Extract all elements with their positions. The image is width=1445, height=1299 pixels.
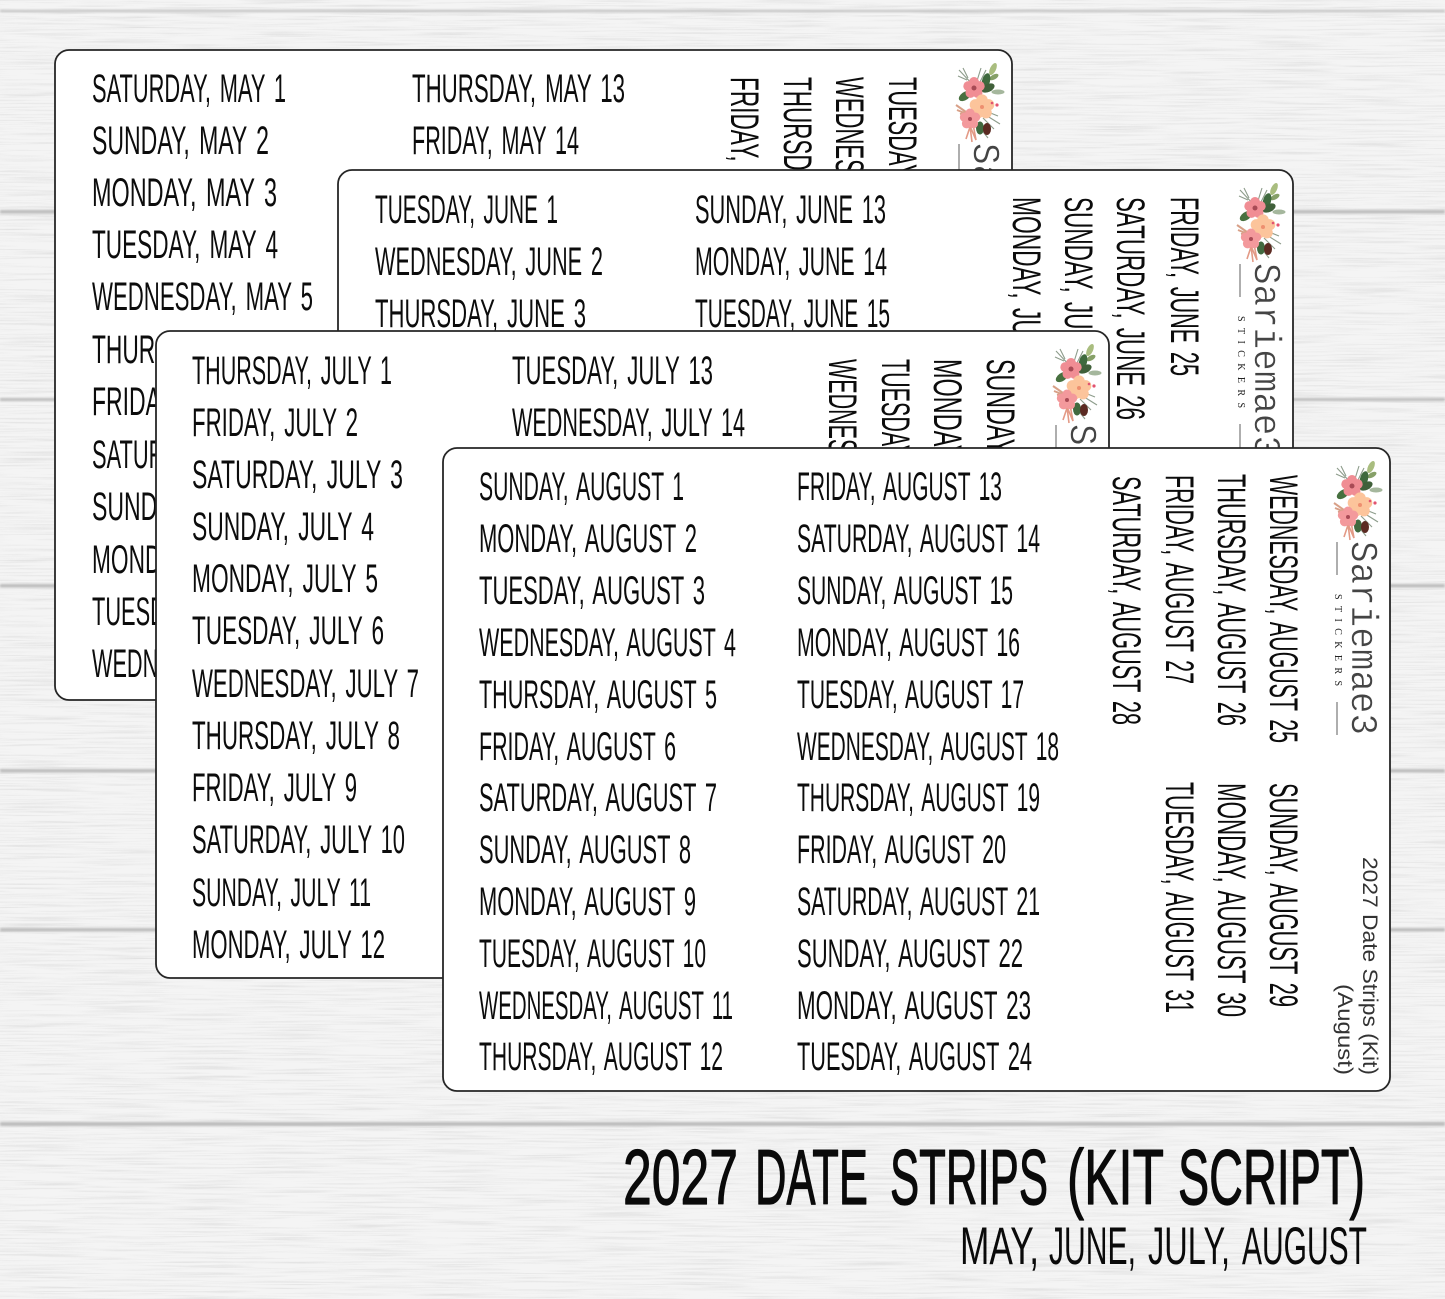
June date strips column one: THURSDAY, JUNE 3 (375, 292, 586, 336)
August date strips column one: THURSDAY, AUGUST 12 (479, 1035, 723, 1079)
June date strips column two (695, 188, 890, 336)
August date strips column two: WEDNESDAY, AUGUST 18 (797, 725, 1059, 769)
July brand name: Sariemae3 (1059, 424, 1102, 618)
icon: June floral logo (1237, 182, 1286, 262)
June date strips column two: MONDAY, JUNE 14 (695, 240, 887, 284)
May date strips column one: MONDAY, MAY 10 (92, 538, 284, 582)
July date strips column one: MONDAY, JULY 5 (192, 557, 378, 601)
July date strips column one: FRIDAY, JULY 9 (192, 766, 357, 810)
July date strips column one: FRIDAY, JULY 2 (192, 401, 358, 445)
May vertical date strips: WEDNESDAY, MAY 26 (827, 77, 871, 309)
May date strips column two (412, 67, 625, 163)
July date strips column two: WEDNESDAY, JULY 14 (512, 401, 745, 445)
subtitle: JUNE, (1049, 1217, 1136, 1276)
May vertical date strips: FRIDAY, MAY 28 (722, 77, 766, 252)
July date strips column one (192, 349, 419, 967)
May date strips column one (92, 67, 320, 686)
May vertical date strips: TUESDAY, MAY 25 (880, 77, 924, 269)
May date strips column one: WEDNESDAY, MAY 5 (92, 275, 313, 319)
August date strips column one: MONDAY, AUGUST 9 (479, 880, 696, 924)
August vertical date strips upper group: FRIDAY, AUGUST 27 (1157, 475, 1201, 684)
title: 2027 (623, 1133, 738, 1221)
May vertical date strips: THURSDAY, MAY 27 (775, 77, 819, 292)
May date strips column one: SATURDAY, MAY 8 (92, 433, 286, 477)
July date strips column one: TUESDAY, JULY 6 (192, 609, 384, 653)
title (623, 1133, 1365, 1221)
July date strips column two (512, 349, 745, 445)
August date strips column two: SUNDAY, AUGUST 15 (797, 569, 1013, 613)
August date strips column one: SATURDAY, AUGUST 7 (479, 776, 717, 820)
August date strips column two: SATURDAY, AUGUST 21 (797, 880, 1040, 924)
title: STRIPS (890, 1133, 1048, 1221)
August vertical date strips upper group (1104, 474, 1305, 743)
August date strips column one: MONDAY, AUGUST 2 (479, 517, 697, 561)
June date strips column one (375, 188, 603, 336)
June date strips column one: TUESDAY, JUNE 1 (375, 188, 558, 232)
July date strips column one: THURSDAY, JULY 8 (192, 714, 400, 758)
August date strips column two: THURSDAY, AUGUST 19 (797, 776, 1040, 820)
May date strips column one: FRIDAY, MAY 7 (92, 380, 257, 424)
sheet caption (1333, 857, 1381, 1075)
August date strips column two: FRIDAY, AUGUST 20 (797, 828, 1006, 872)
August vertical date strips lower group: SUNDAY, AUGUST 29 (1261, 783, 1305, 1007)
June date strips column two: SUNDAY, JUNE 13 (695, 188, 886, 232)
panel: July sticker sheet (156, 331, 1109, 978)
May brand name: Sariemae3 (962, 143, 1005, 337)
June date strips column two: TUESDAY, JUNE 15 (695, 292, 890, 336)
sheet caption: (August) (1333, 984, 1356, 1075)
August brand logo text: Sariemae3 (1340, 541, 1383, 735)
August date strips column two: FRIDAY, AUGUST 13 (797, 465, 1002, 509)
July vertical date strips: SUNDAY, JULY 25 (978, 359, 1022, 557)
August date strips column one: WEDNESDAY, AUGUST 11 (479, 984, 733, 1028)
August date strips column two: MONDAY, AUGUST 23 (797, 984, 1031, 1028)
subtitle: MAY, (960, 1217, 1039, 1276)
August date strips column two: SATURDAY, AUGUST 14 (797, 517, 1040, 561)
August date strips column two: TUESDAY, AUGUST 24 (797, 1035, 1032, 1079)
May date strips column one: SUNDAY, MAY 9 (92, 485, 269, 529)
July date strips column one: WEDNESDAY, JULY 7 (192, 662, 419, 706)
August vertical date strips upper group: THURSDAY, AUGUST 26 (1209, 474, 1253, 726)
June brand name: Sariemae3 (1243, 263, 1286, 457)
subtitle: JULY, (1148, 1217, 1230, 1276)
July vertical date strips: WEDNESDAY, JULY 28 (820, 359, 864, 591)
August date strips column two (797, 465, 1059, 1079)
June vertical date strips: SATURDAY, JUNE 26 (1108, 197, 1152, 420)
August date strips column one (479, 465, 736, 1079)
July date strips column two: TUESDAY, JULY 13 (512, 349, 713, 393)
July vertical date strips (820, 359, 1022, 591)
August vertical date strips lower group: MONDAY, AUGUST 30 (1209, 783, 1253, 1017)
August vertical date strips upper group: WEDNESDAY, AUGUST 25 (1261, 475, 1305, 743)
subtitle (960, 1217, 1367, 1276)
panel: May sticker sheet (55, 50, 1012, 700)
May date strips column two: THURSDAY, MAY 13 (412, 67, 625, 111)
July date strips column one: SATURDAY, JULY 10 (192, 818, 405, 862)
May date strips column one: WEDNESDAY, MAY 12 (92, 642, 320, 686)
August date strips column one: WEDNESDAY, AUGUST 4 (479, 621, 736, 665)
June vertical date strips: FRIDAY, JUNE 25 (1162, 197, 1206, 376)
May date strips column one: THURSDAY, MAY 6 (92, 328, 297, 372)
May date strips column one: MONDAY, MAY 3 (92, 171, 277, 215)
July date strips column one: THURSDAY, JULY 1 (192, 349, 392, 393)
July date strips column one: SUNDAY, JULY 11 (192, 871, 371, 915)
August date strips column one: SUNDAY, AUGUST 8 (479, 828, 691, 872)
panel: August sticker sheet (443, 448, 1390, 1091)
August vertical date strips upper group: SATURDAY, AUGUST 28 (1104, 476, 1148, 725)
August date strips column two: MONDAY, AUGUST 16 (797, 621, 1020, 665)
August brand logo text: STICKERS (1332, 594, 1343, 686)
June date strips column one: WEDNESDAY, JUNE 2 (375, 240, 603, 284)
July vertical date strips: TUESDAY, JULY 27 (873, 359, 917, 554)
title: (KIT (1067, 1133, 1164, 1221)
July date strips column one: SUNDAY, JULY 4 (192, 505, 374, 549)
May date strips column one: TUESDAY, MAY 4 (92, 223, 278, 267)
icon: May floral logo (956, 62, 1004, 142)
July date strips column one: MONDAY, JULY 12 (192, 923, 385, 967)
June brand name: STICKERS (1235, 316, 1246, 408)
panel: June sticker sheet (338, 170, 1293, 815)
August date strips column one: SUNDAY, AUGUST 1 (479, 465, 684, 509)
June vertical date strips (1004, 197, 1206, 420)
May date strips column one: SATURDAY, MAY 1 (92, 67, 286, 111)
August vertical date strips lower group (1157, 782, 1305, 1017)
May vertical date strips (722, 77, 924, 309)
August date strips column one: FRIDAY, AUGUST 6 (479, 725, 676, 769)
May date strips column two: FRIDAY, MAY 14 (412, 119, 579, 163)
May date strips column one: TUESDAY, MAY 11 (92, 590, 282, 634)
August date strips column two: SUNDAY, AUGUST 22 (797, 932, 1023, 976)
August vertical date strips lower group: TUESDAY, AUGUST 31 (1157, 782, 1201, 1013)
August date strips column one: TUESDAY, AUGUST 10 (479, 932, 706, 976)
sheet caption: 2027 Date Strips (Kit) (1358, 857, 1381, 1075)
August date strips column two: TUESDAY, AUGUST 17 (797, 673, 1024, 717)
July date strips column one: SATURDAY, JULY 3 (192, 453, 403, 497)
August date strips column one: THURSDAY, AUGUST 5 (479, 673, 717, 717)
icon: July floral logo (1053, 343, 1102, 423)
icon: August floral logo (1334, 460, 1382, 540)
June vertical date strips: SUNDAY, JUNE 27 (1056, 197, 1100, 395)
August date strips column one: TUESDAY, AUGUST 3 (479, 569, 705, 613)
June vertical date strips: MONDAY, JUNE 28 (1004, 197, 1048, 402)
title: DATE (755, 1133, 868, 1221)
July vertical date strips: MONDAY, JULY 26 (925, 359, 969, 564)
May date strips column one: SUNDAY, MAY 2 (92, 119, 269, 163)
